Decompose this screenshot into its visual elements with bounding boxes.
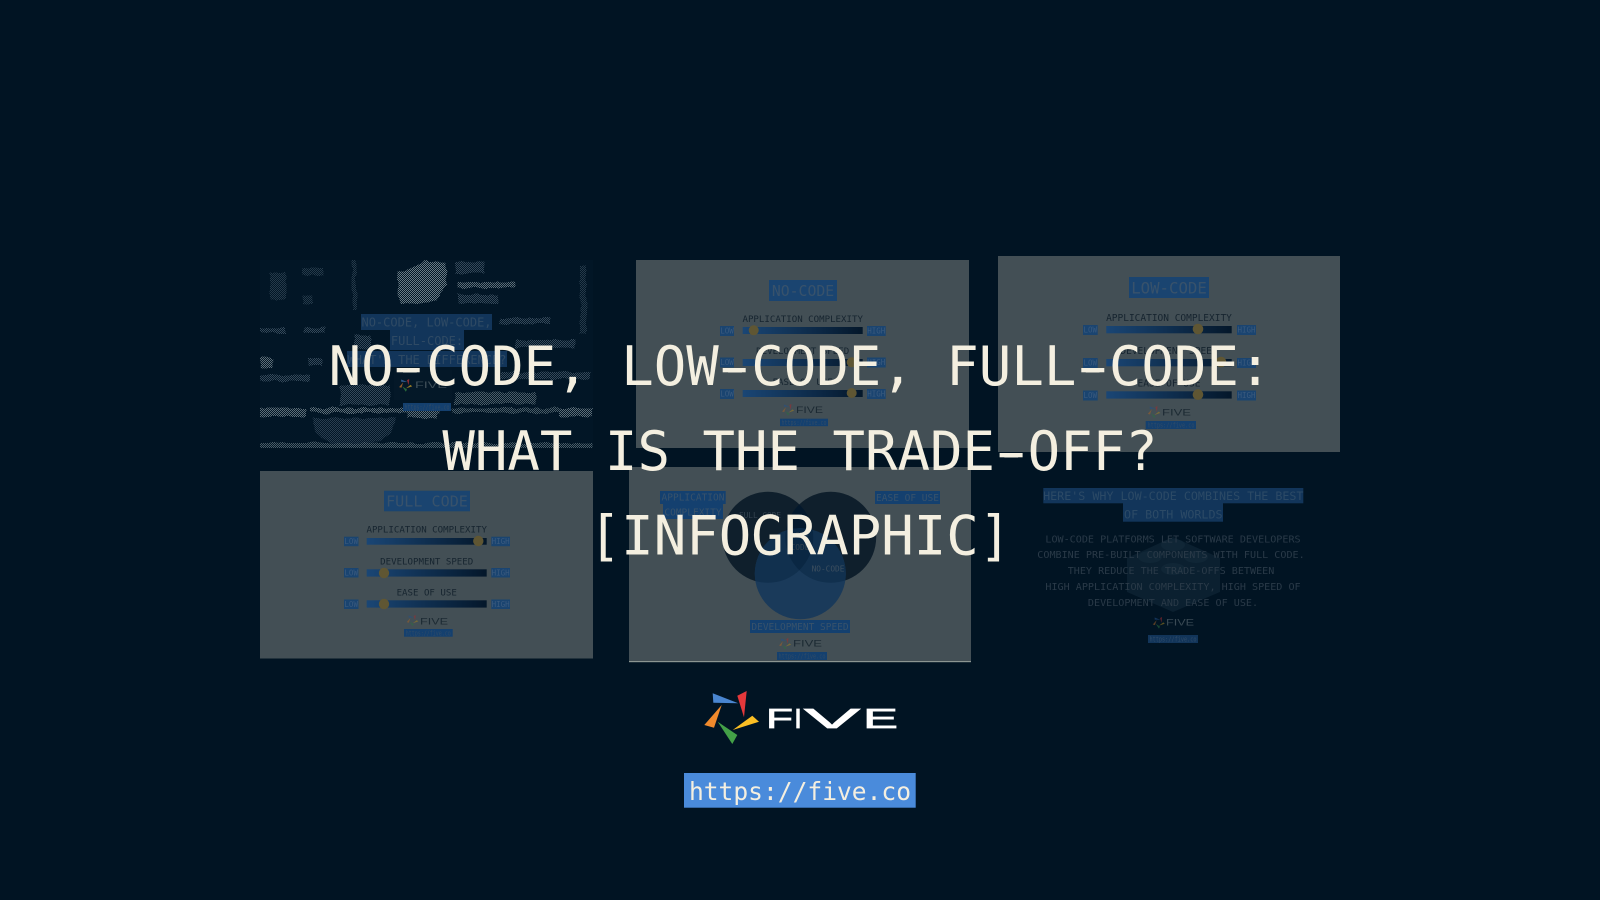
slider: application complexity: APPLICATION COMPLEXITY <box>1106 313 1232 324</box>
panel: why low-code <box>1037 488 1305 644</box>
small logo: FIVE <box>1162 408 1191 418</box>
url badge: https://five.co <box>689 777 911 806</box>
slider: application complexity: LOW <box>344 537 358 546</box>
venn label: application complexity: APPLICATION <box>662 493 725 504</box>
venn label: application complexity: COMPLEXITY <box>664 508 722 519</box>
panel: full code sliders <box>260 471 593 658</box>
small logo <box>404 615 453 637</box>
slider: development speed: DEVELOPMENT SPEED <box>380 558 473 568</box>
small logo: https://five.co <box>782 419 826 427</box>
small logo <box>1148 617 1198 644</box>
body text: HIGH APPLICATION COMPLEXITY, HIGH SPEED OF <box>1045 582 1301 593</box>
wordmark: V <box>804 703 861 734</box>
small logo: FIVE <box>793 638 822 648</box>
small logo <box>394 370 452 412</box>
wordmark: E <box>863 703 898 734</box>
small logo: FIVE <box>796 405 823 415</box>
slider: application complexity: HIGH <box>1237 326 1256 334</box>
wordmark: I <box>794 703 802 734</box>
slider: application complexity <box>720 315 886 336</box>
small logo: https://five.co <box>404 404 450 412</box>
slider: ease of use <box>344 589 510 609</box>
slider: application complexity <box>1083 313 1256 335</box>
slider: application complexity: LOW <box>1084 326 1098 334</box>
body text <box>1037 534 1305 609</box>
slider: development speed: HIGH <box>1237 358 1256 368</box>
small logo <box>1146 406 1196 430</box>
slider: development speed: DEVELOPMENT SPEED <box>1120 346 1218 357</box>
panel: venn diagram <box>629 467 971 662</box>
slider: ease of use: HIGH <box>1237 391 1256 400</box>
slider: ease of use: LOW <box>1084 391 1098 400</box>
body text: DEVELOPMENT AND EASE OF USE. <box>1088 598 1258 609</box>
small logo: FIVE <box>415 380 447 390</box>
slider: application complexity: HIGH <box>492 537 510 546</box>
panel: photo cover slide <box>260 260 593 451</box>
slider: development speed <box>344 558 510 578</box>
venn label: no-code: NO-CODE <box>812 565 845 574</box>
panel: low-code sliders <box>998 256 1340 452</box>
panel: no-code sliders <box>636 260 969 448</box>
small logo <box>780 404 828 427</box>
panel title: LOW-CODE <box>1131 278 1207 297</box>
slider: application complexity <box>344 526 510 546</box>
title <box>329 335 1271 568</box>
body text: LOW-CODE PLATFORMS LET SOFTWARE DEVELOPERS <box>1045 534 1301 545</box>
slider: ease of use <box>720 378 886 399</box>
wordmark <box>766 703 898 734</box>
title: NO-CODE, LOW-CODE, FULL-CODE: <box>329 335 1271 398</box>
slider: application complexity: HIGH <box>867 326 886 336</box>
slider: application complexity: APPLICATION COMPLEXITY <box>742 315 863 325</box>
venn label: low-code: LOW- <box>791 531 809 540</box>
small logo: https://five.co <box>1150 636 1196 644</box>
small logo: https://five.co <box>778 652 826 660</box>
body text: COMBINE PRE-BUILT COMPONENTS WITH FULL CODE. <box>1037 550 1305 561</box>
slider: ease of use: EASE OF USE <box>773 378 833 388</box>
title: [INFOGRAPHIC] <box>589 504 1011 568</box>
slider: ease of use <box>1083 379 1256 400</box>
small logo: https://five.co <box>1148 422 1194 430</box>
small logo: https://five.co <box>406 629 451 637</box>
venn label: code: CODE <box>791 543 810 552</box>
photo: keyboard and hand <box>260 260 593 451</box>
panel title: FULL CODE <box>386 493 468 511</box>
slider: ease of use: EASE OF USE <box>397 589 457 599</box>
heading highlight: OF BOTH WORLDS <box>1124 507 1223 521</box>
slider: ease of use: HIGH <box>867 390 886 398</box>
body text: THEY REDUCE THE TRADE-OFFS BETWEEN <box>1068 566 1274 577</box>
small logo: FIVE <box>1166 618 1194 628</box>
icon: brick <box>1127 537 1220 612</box>
venn circles <box>722 492 876 619</box>
small logo <box>777 638 827 660</box>
heading highlight <box>347 314 507 367</box>
heading highlight: FULL-CODE: <box>391 334 463 348</box>
wordmark: F <box>766 703 793 734</box>
slider: ease of use: EASE OF USE <box>1138 379 1201 390</box>
panel title: NO-CODE <box>772 283 834 300</box>
slider: development speed: LOW <box>344 568 358 578</box>
venn label: development speed: DEVELOPMENT SPEED <box>751 622 849 633</box>
heading highlight <box>1043 488 1303 522</box>
slider: development speed: LOW <box>720 358 734 367</box>
heading highlight: HERE'S WHY LOW-CODE COMBINES THE BEST <box>1043 489 1303 503</box>
venn label: full code: FULL CODE <box>739 511 781 520</box>
slider: development speed <box>1083 346 1256 368</box>
slider: development speed <box>720 347 886 368</box>
slider: development speed: HIGH <box>867 358 886 367</box>
slider: development speed: LOW <box>1084 358 1098 368</box>
slider: development speed: DEVELOPMENT SPEED <box>756 347 849 357</box>
slider: application complexity: APPLICATION COMPLEXITY <box>366 526 487 536</box>
slider: ease of use: LOW <box>720 390 734 398</box>
heading highlight: WHAT'S THE DIFFERENCE? <box>348 353 506 367</box>
slider: ease of use: LOW <box>344 600 358 609</box>
venn label: application complexity <box>660 491 726 519</box>
slider: ease of use: HIGH <box>492 600 510 609</box>
logo: five <box>704 691 898 744</box>
icon: pinwheel <box>704 691 759 744</box>
slider: development speed: HIGH <box>492 568 510 578</box>
title: WHAT IS THE TRADE-OFF? <box>442 420 1158 483</box>
venn label: ease of use: EASE OF USE <box>876 493 939 504</box>
small logo: FIVE <box>420 616 448 626</box>
slider: application complexity: LOW <box>720 326 734 336</box>
heading highlight: NO-CODE, LOW-CODE, <box>361 316 492 330</box>
